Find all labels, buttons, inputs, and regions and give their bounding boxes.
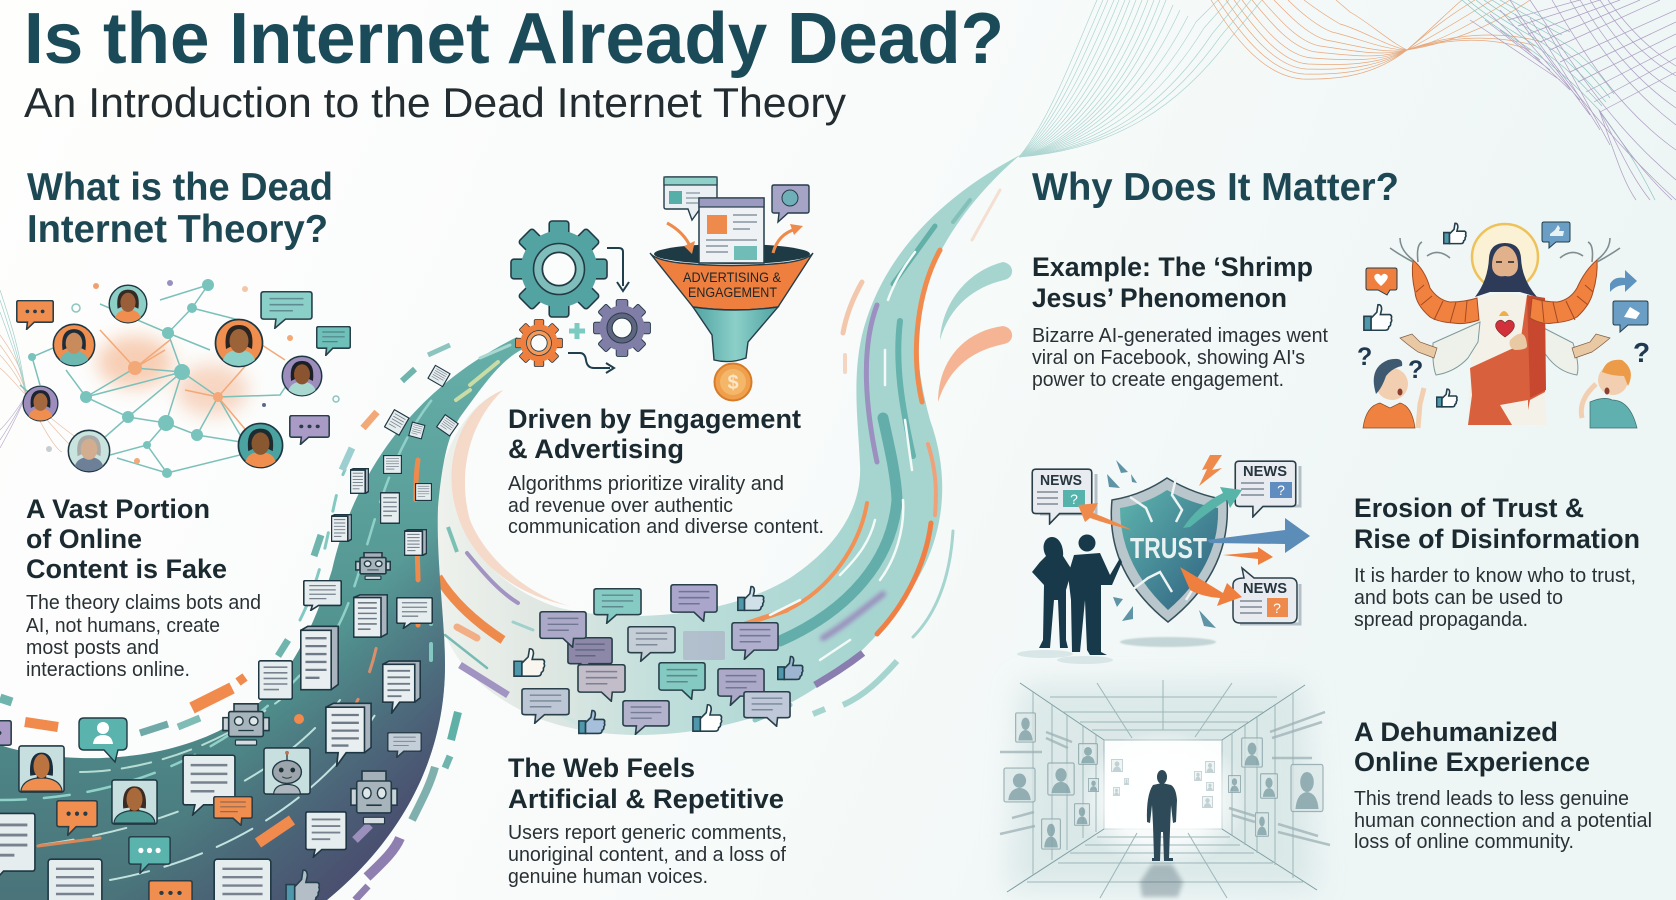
stream of posts, bots and bubbles <box>0 365 458 900</box>
text block: engagement <box>508 404 824 538</box>
text block: dehumanized: human connection and a potential <box>1354 809 1652 832</box>
news cards: ? <box>1070 491 1078 507</box>
cluster of repetitive chat bubbles <box>514 585 803 734</box>
text block: fake content: A Vast Portion <box>26 494 210 524</box>
text block: dehumanized: This trend leads to less genuine <box>1354 787 1629 810</box>
faint panels on the back wall <box>1111 759 1215 808</box>
text block: artificial web: Users report generic comments, <box>508 821 787 844</box>
text block: artificial web: The Web Feels <box>508 753 695 783</box>
text block: erosion of trust: It is harder to know who to trust, <box>1354 564 1636 587</box>
arrows bursting from the shield <box>1078 487 1310 606</box>
coin: $ <box>727 372 739 394</box>
flying shards and bolt <box>1107 460 1216 628</box>
gears illustration <box>511 221 650 373</box>
text block: engagement: communication and diverse content. <box>508 515 824 538</box>
arrows between gears <box>568 248 629 373</box>
trust shield illustration <box>1017 455 1310 664</box>
standing figure <box>1140 770 1183 897</box>
text block: artificial web: unoriginal content, and a loss of <box>508 843 786 866</box>
text block: artificial web: genuine human voices. <box>508 865 708 888</box>
chat bubbles <box>17 292 350 444</box>
heading: what is the theory <box>27 166 333 251</box>
text block: erosion of trust: Rise of Disinformation <box>1354 524 1640 554</box>
portrait panels <box>1004 713 1323 849</box>
dark ribbon of content flowing from the bottom left <box>0 337 523 900</box>
news cards: ? <box>1273 600 1281 616</box>
news cards: NEWS <box>1040 472 1082 489</box>
faint text streaks on the walls <box>1000 712 1330 845</box>
news cards: NEWS <box>1243 463 1287 480</box>
text block: fake content: of Online <box>26 524 142 554</box>
title: Is the Internet Already Dead? <box>24 0 1004 79</box>
coin <box>714 364 752 400</box>
hands <box>1400 334 1437 358</box>
reaction icons: ? <box>1633 337 1650 368</box>
text block: engagement: Driven by Engagement <box>508 404 801 434</box>
text block: erosion of trust: and bots can be used to <box>1354 586 1563 609</box>
text block: erosion of trust: spread propaganda. <box>1354 608 1528 631</box>
corridor walls and soft glow <box>1007 683 1317 890</box>
ribbon streaks <box>0 345 510 880</box>
arrows into funnel <box>667 223 796 253</box>
text block: dehumanized: A Dehumanized <box>1354 717 1558 747</box>
dashes around the ribbon <box>0 345 458 900</box>
robe body <box>1468 294 1547 425</box>
heading: what is the theory: Internet Theory? <box>27 208 328 251</box>
red drape <box>1468 295 1545 425</box>
shrimp Jesus illustration <box>1357 222 1650 428</box>
text block: fake content: interactions online. <box>26 658 190 681</box>
text block: fake content <box>26 494 261 681</box>
peach arc <box>451 390 570 606</box>
text block: fake content: AI, not humans, create <box>26 614 220 637</box>
avatars <box>23 285 322 472</box>
text block: artificial web: Artificial & Repetitive <box>508 784 784 814</box>
text block: fake content: Content is Fake <box>26 554 227 584</box>
heading: what is the theory: What is the Dead <box>27 166 333 209</box>
text block: shrimp Jesus: power to create engagement. <box>1032 368 1284 391</box>
halo <box>1472 224 1538 290</box>
pale U-shaped ribbon <box>436 155 1020 735</box>
reaction icons: ? <box>1357 343 1372 371</box>
chest hand and heart <box>1510 334 1527 350</box>
shrimp arms <box>1412 260 1479 324</box>
text block: artificial web <box>508 753 787 888</box>
text block: engagement: & Advertising <box>508 434 684 464</box>
sleeves <box>1433 322 1480 375</box>
funnel label: ENGAGEMENT <box>688 284 777 300</box>
news cards <box>1032 461 1300 624</box>
network of people illustration <box>17 279 350 478</box>
ribbon streaks <box>438 200 970 725</box>
text block: shrimp Jesus: Jesus’ Phenomenon <box>1032 283 1287 313</box>
text block: dehumanized: Online Experience <box>1354 747 1590 777</box>
heading: why does it matter: Why Does It Matter? <box>1032 166 1399 209</box>
text block: fake content: The theory claims bots and <box>26 591 261 614</box>
reaction icons <box>1357 222 1650 407</box>
text block: shrimp Jesus <box>1032 252 1328 391</box>
outer dashes and swooshes <box>813 190 1000 714</box>
right child <box>1581 360 1637 428</box>
network nodes <box>28 279 339 478</box>
text block: dehumanized <box>1354 717 1652 853</box>
text block: shrimp Jesus: Bizarre AI-generated images went <box>1032 324 1328 347</box>
swoosh: teal <box>940 262 1012 340</box>
advertising funnel illustration <box>650 177 813 400</box>
wave mesh: left edge <box>0 290 80 452</box>
funnel label <box>683 269 782 300</box>
dehumanised corridor illustration <box>1000 680 1330 898</box>
browser windows <box>654 177 810 264</box>
subtitle: An Introduction to the Dead Internet Theory <box>24 79 846 126</box>
news cards: ? <box>1277 482 1285 498</box>
left child <box>1363 359 1424 428</box>
text block: dehumanized: loss of online community. <box>1354 830 1574 853</box>
shield label: TRUST <box>1130 533 1207 565</box>
text block: engagement: Algorithms prioritize virality and <box>508 472 784 495</box>
head and beard <box>1475 243 1537 297</box>
reaction icons: ? <box>1408 356 1423 384</box>
wave mesh: top right <box>1019 0 1676 200</box>
text block: engagement: ad revenue over authentic <box>508 494 733 517</box>
plus sign <box>569 323 585 339</box>
funnel label: ADVERTISING & <box>683 269 782 285</box>
text block: erosion of trust <box>1354 493 1640 631</box>
swoosh: peach <box>938 326 1012 402</box>
news cards: NEWS <box>1243 580 1287 597</box>
funnel body <box>650 253 813 310</box>
text block: shrimp Jesus: viral on Facebook, showing AI's <box>1032 346 1305 369</box>
text block: fake content: most posts and <box>26 636 159 659</box>
shield <box>1111 478 1227 622</box>
text block: shrimp Jesus: Example: The ‘Shrimp <box>1032 252 1313 282</box>
two silhouetted people <box>1017 534 1122 664</box>
network lines <box>20 285 290 473</box>
text block: erosion of trust: Erosion of Trust & <box>1354 493 1584 523</box>
bubble with person <box>79 718 127 762</box>
